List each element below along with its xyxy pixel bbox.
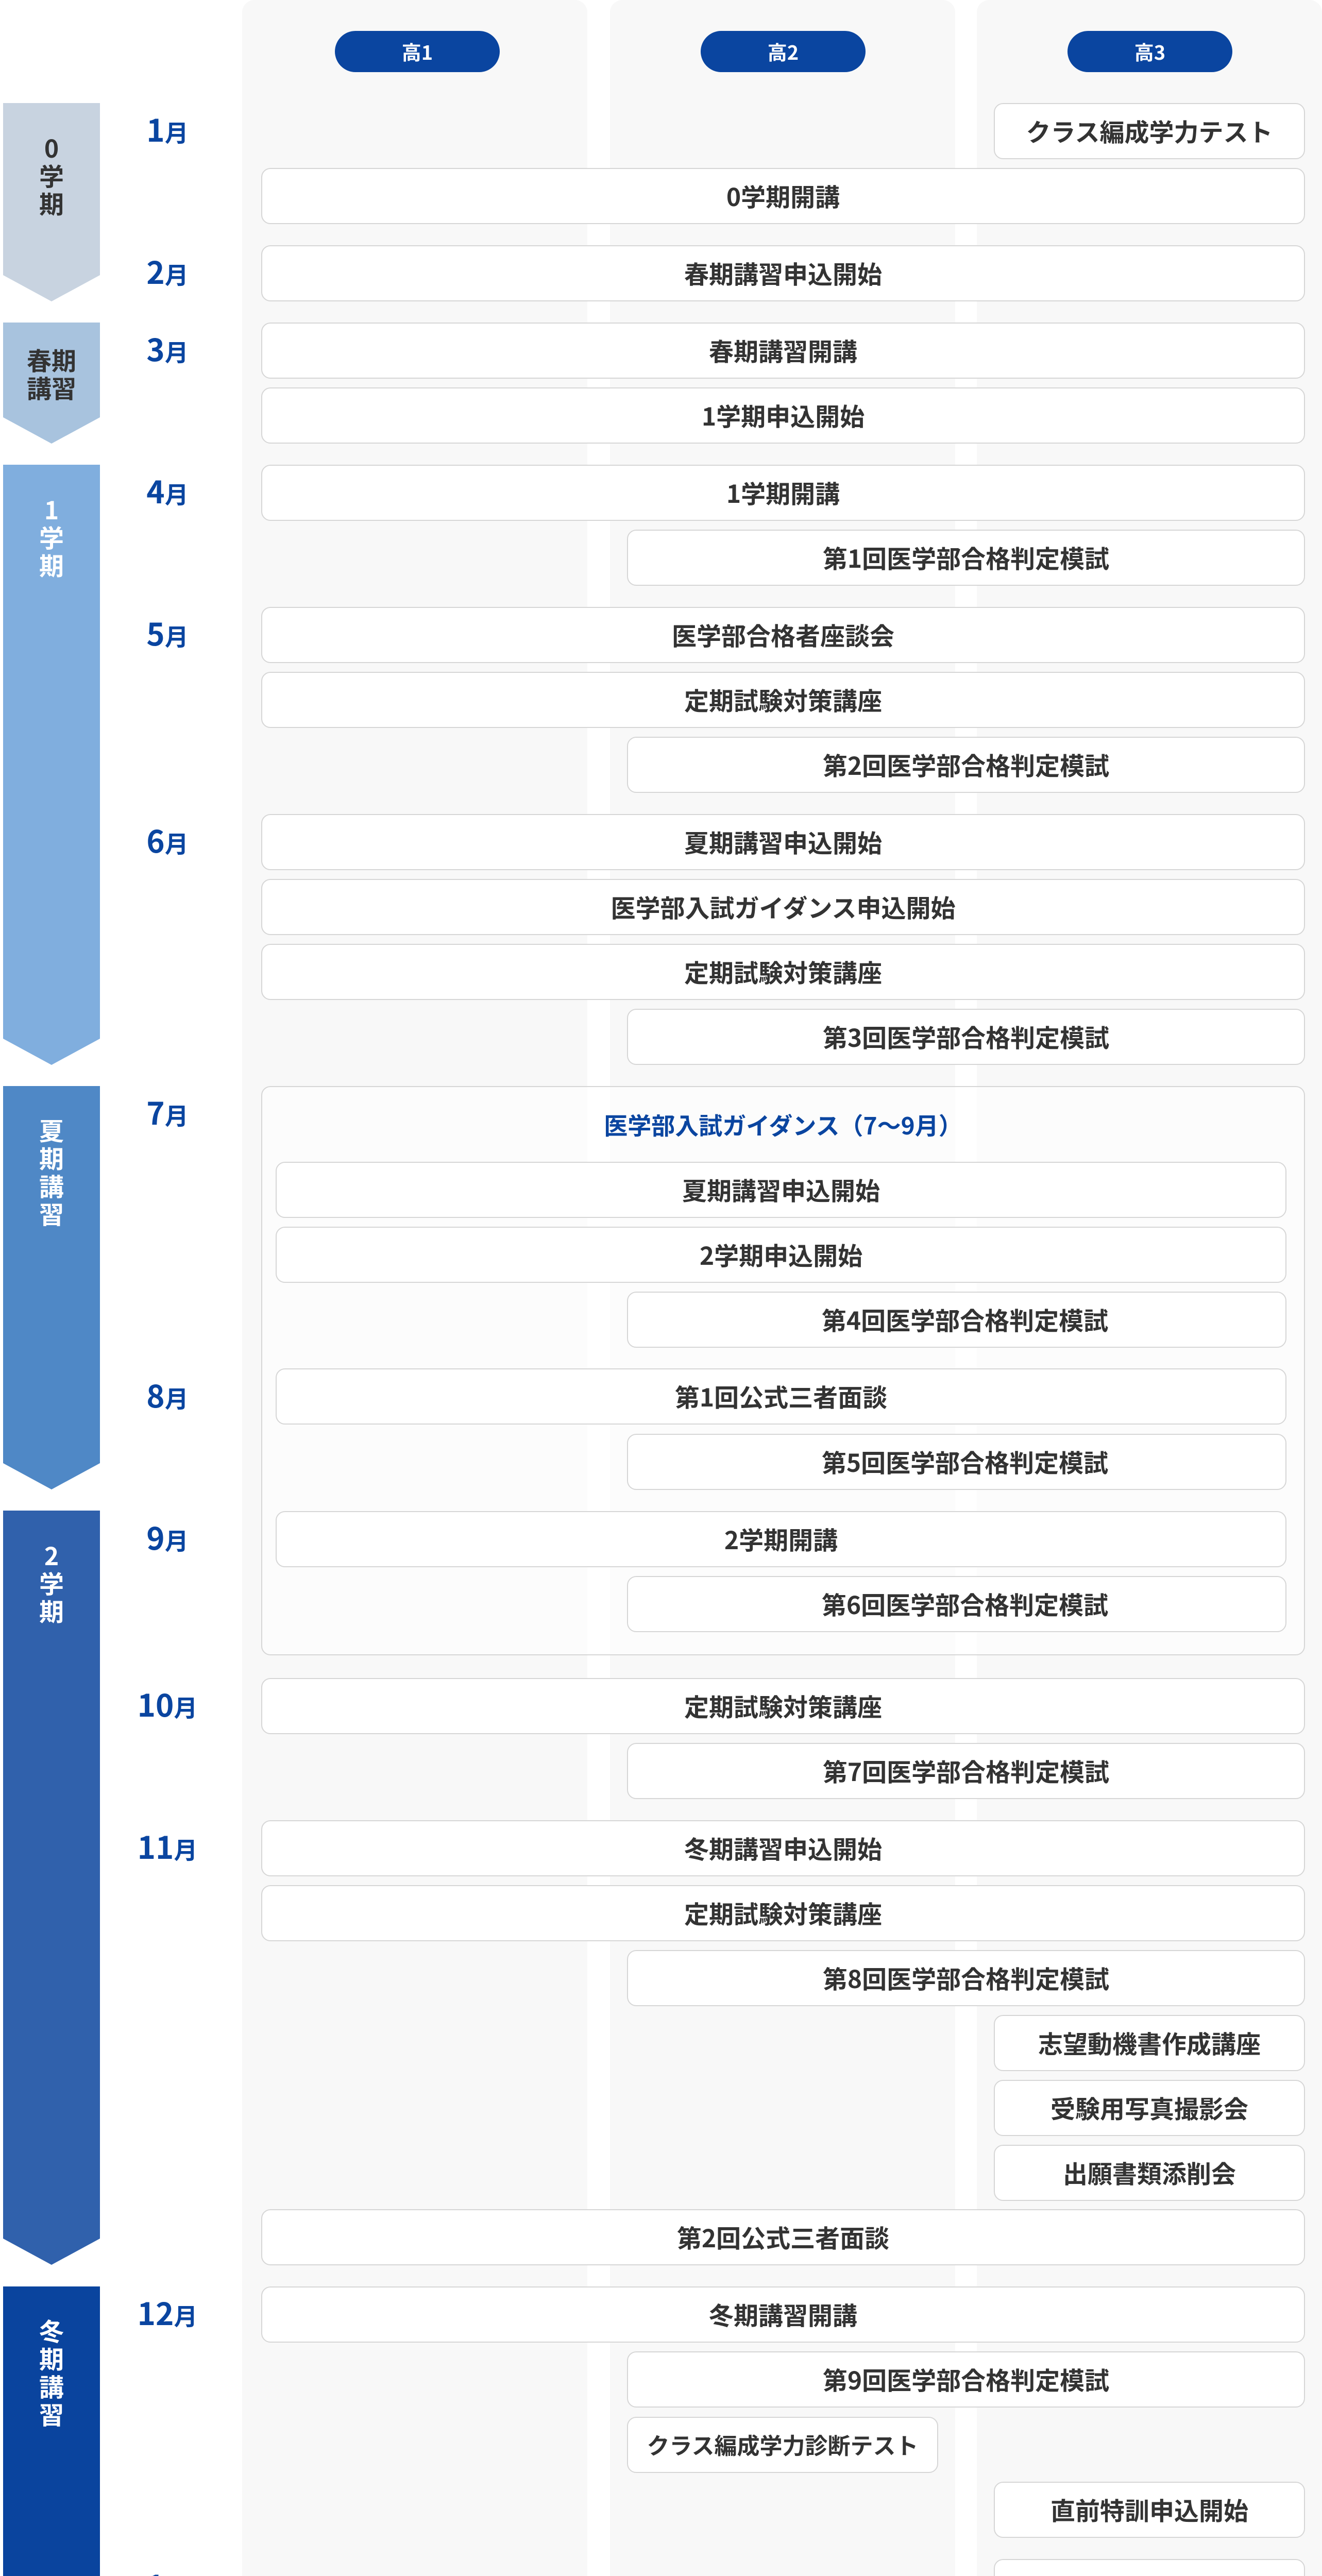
event: 第5回医学部合格判定模試 xyxy=(627,1434,1286,1490)
event: 定期試験対策講座 xyxy=(261,672,1305,728)
term arrow: 1学期 xyxy=(3,465,100,1065)
event: 夏期講習申込開始: 夏期講習申込開始 xyxy=(684,823,882,859)
column: 高3 xyxy=(977,0,1322,2576)
event: 第8回医学部合格判定模試: 第8回医学部合格判定模試 xyxy=(823,1959,1109,1995)
event: 2学期申込開始 xyxy=(276,1227,1286,1283)
event: 冬期講習開講 xyxy=(261,2286,1305,2343)
event: クラス編成学力診断テスト xyxy=(627,2417,938,2473)
header: 高2 xyxy=(701,31,866,72)
term arrow: 夏期講習: 夏 xyxy=(39,1111,64,1147)
column: 高2 xyxy=(610,0,955,2576)
event: 2学期開講 xyxy=(276,1511,1286,1567)
header: 高1: 高1 xyxy=(402,37,433,65)
header: 高1 xyxy=(335,31,500,72)
event: 定期試験対策講座 xyxy=(261,1678,1305,1734)
term arrow: 0学期: 期 xyxy=(39,184,64,221)
event: 第2回公式三者面談 xyxy=(261,2209,1305,2265)
event: 第4回医学部合格判定模試: 第4回医学部合格判定模試 xyxy=(822,1301,1108,1337)
term arrow: 冬期講習: 講 xyxy=(39,2367,64,2403)
term arrow: 2学期: 2 xyxy=(44,1536,59,1572)
month: 12月: 12月 xyxy=(138,2290,197,2334)
event: 医学部入試ガイダンス申込開始: 医学部入試ガイダンス申込開始 xyxy=(611,888,956,924)
event: 医学部合格者座談会: 医学部合格者座談会 xyxy=(672,616,894,652)
term arrow: 夏期講習: 講 xyxy=(39,1167,64,1203)
event: 定期試験対策講座: 定期試験対策講座 xyxy=(684,1894,882,1930)
event: 定期試験対策講座: 定期試験対策講座 xyxy=(684,681,882,717)
month: 1月: 1月 xyxy=(146,106,189,151)
event: 定期試験対策講座 xyxy=(261,944,1305,1000)
event: 冬期講習開講: 冬期講習開講 xyxy=(709,2296,857,2332)
header: 高3 xyxy=(1067,31,1232,72)
event: 第1回公式三者面談 xyxy=(276,1368,1286,1425)
panel: 医学部入試ガイダンス group xyxy=(261,1086,1305,1655)
event: 出願書類添削会 xyxy=(994,2145,1305,2201)
term arrow: 冬期講習 xyxy=(3,2286,100,2576)
event: 志望動機書作成講座 xyxy=(994,2015,1305,2071)
event: 夏期講習申込開始: 夏期講習申込開始 xyxy=(682,1171,880,1207)
term arrow: 2学期: 期 xyxy=(39,1592,64,1628)
term arrow: 春期講習: 春期 xyxy=(27,341,76,377)
month: 3月: 3月 xyxy=(146,326,189,370)
event: 第4回医学部合格判定模試 xyxy=(627,1292,1286,1348)
event: クラス編成学力テスト: クラス編成学力テスト xyxy=(1026,112,1273,148)
term arrow: 冬期講習: 冬 xyxy=(39,2312,64,2348)
event: 0学期開講: 0学期開講 xyxy=(726,177,840,213)
month: 8月: 8月 xyxy=(146,1372,189,1417)
term arrow: 春期講習: 講習 xyxy=(27,369,76,405)
month: 7月: 7月 xyxy=(146,1089,189,1134)
term arrow: 1学期: 1 xyxy=(44,490,59,527)
event: 第6回医学部合格判定模試: 第6回医学部合格判定模試 xyxy=(822,1585,1108,1621)
event: 冬期講習申込開始 xyxy=(261,1820,1305,1876)
term arrow: 1学期: 学 xyxy=(39,518,64,554)
month: 2月: 2月 xyxy=(146,248,189,293)
month: 5月: 5月 xyxy=(146,610,189,655)
event: 1学期開講 xyxy=(261,465,1305,521)
event: 第2回公式三者面談: 第2回公式三者面談 xyxy=(677,2218,889,2255)
event: 春期講習開講 xyxy=(261,323,1305,379)
event: 第3回医学部合格判定模試: 第3回医学部合格判定模試 xyxy=(823,1018,1109,1054)
event: 1学期開講: 1学期開講 xyxy=(726,474,840,510)
event: 受験用写真撮影会 xyxy=(994,2080,1305,2136)
month: 9月: 9月 xyxy=(146,1514,189,1559)
group heading: 医学部入試ガイダンス（7〜9月） xyxy=(604,1108,962,1142)
event: 第7回医学部合格判定模試 xyxy=(627,1743,1305,1799)
event: 医学部入試ガイダンス申込開始 xyxy=(261,879,1305,935)
event: 1学期申込開始 xyxy=(261,387,1305,444)
event: 1学期申込開始: 1学期申込開始 xyxy=(702,397,865,433)
term arrow: 0学期: 0 xyxy=(44,129,59,165)
event: 医学部合格者座談会 xyxy=(261,607,1305,663)
event: 第5回医学部合格判定模試: 第5回医学部合格判定模試 xyxy=(822,1443,1108,1479)
term arrow: 0学期 xyxy=(3,103,100,301)
month: 6月: 6月 xyxy=(146,817,189,862)
event: 第1回医学部合格判定模試: 第1回医学部合格判定模試 xyxy=(823,539,1109,575)
event: 定期試験対策講座 xyxy=(261,1885,1305,1941)
month: 11月: 11月 xyxy=(138,1823,197,1868)
term arrow: 2学期: 学 xyxy=(39,1564,64,1600)
event: 大学入学共通テスト xyxy=(994,2559,1305,2576)
term arrow: 夏期講習: 期 xyxy=(39,1139,64,1175)
event: クラス編成学力テスト xyxy=(994,103,1305,159)
event: 第9回医学部合格判定模試: 第9回医学部合格判定模試 xyxy=(823,2361,1109,2397)
term arrow: 冬期講習: 習 xyxy=(39,2395,64,2431)
event: 第1回医学部合格判定模試 xyxy=(627,530,1305,586)
event: 第6回医学部合格判定模試 xyxy=(627,1576,1286,1632)
term arrow: 2学期 xyxy=(3,1511,100,2265)
term arrow: 夏期講習: 習 xyxy=(39,1195,64,1231)
event: 第8回医学部合格判定模試 xyxy=(627,1950,1305,2006)
event: 第1回公式三者面談: 第1回公式三者面談 xyxy=(675,1378,887,1414)
event: 直前特訓申込開始 xyxy=(994,2482,1305,2538)
event: 定期試験対策講座: 定期試験対策講座 xyxy=(684,1687,882,1723)
event: 夏期講習申込開始 xyxy=(276,1162,1286,1218)
event: 0学期開講 xyxy=(261,168,1305,224)
event: 春期講習申込開始 xyxy=(261,245,1305,301)
event: 冬期講習申込開始: 冬期講習申込開始 xyxy=(684,1829,882,1866)
event: 第2回医学部合格判定模試: 第2回医学部合格判定模試 xyxy=(823,746,1109,782)
event: 志望動機書作成講座: 志望動機書作成講座 xyxy=(1038,2024,1261,2060)
term arrow: 0学期: 学 xyxy=(39,157,64,193)
event: 2学期開講: 2学期開講 xyxy=(724,1520,838,1556)
term arrow: 1学期: 期 xyxy=(39,546,64,582)
event: 2学期申込開始: 2学期申込開始 xyxy=(700,1236,862,1272)
event: 出願書類添削会: 出願書類添削会 xyxy=(1063,2154,1236,2190)
month: 4月: 4月 xyxy=(146,468,189,513)
event: 直前特訓申込開始: 直前特訓申込開始 xyxy=(1050,2491,1248,2527)
header: 高2: 高2 xyxy=(768,37,799,65)
event: 第3回医学部合格判定模試 xyxy=(627,1009,1305,1065)
term arrow: 冬期講習: 期 xyxy=(39,2340,64,2376)
column: 高1 xyxy=(242,0,587,2576)
event: クラス編成学力診断テスト: クラス編成学力診断テスト xyxy=(647,2428,919,2461)
event: 定期試験対策講座: 定期試験対策講座 xyxy=(684,953,882,989)
event: 第9回医学部合格判定模試 xyxy=(627,2351,1305,2408)
event: 第7回医学部合格判定模試: 第7回医学部合格判定模試 xyxy=(823,1752,1109,1788)
month: 10月: 10月 xyxy=(138,1681,197,1726)
term arrow: 春期講習 xyxy=(3,323,100,444)
event: 夏期講習申込開始 xyxy=(261,814,1305,870)
term arrow: 夏期講習 xyxy=(3,1086,100,1489)
event: 第2回医学部合格判定模試 xyxy=(627,737,1305,793)
event: 受験用写真撮影会: 受験用写真撮影会 xyxy=(1050,2089,1248,2125)
header: 高3: 高3 xyxy=(1134,37,1165,65)
event: 春期講習申込開始: 春期講習申込開始 xyxy=(684,255,882,291)
event: 春期講習開講: 春期講習開講 xyxy=(709,332,857,368)
